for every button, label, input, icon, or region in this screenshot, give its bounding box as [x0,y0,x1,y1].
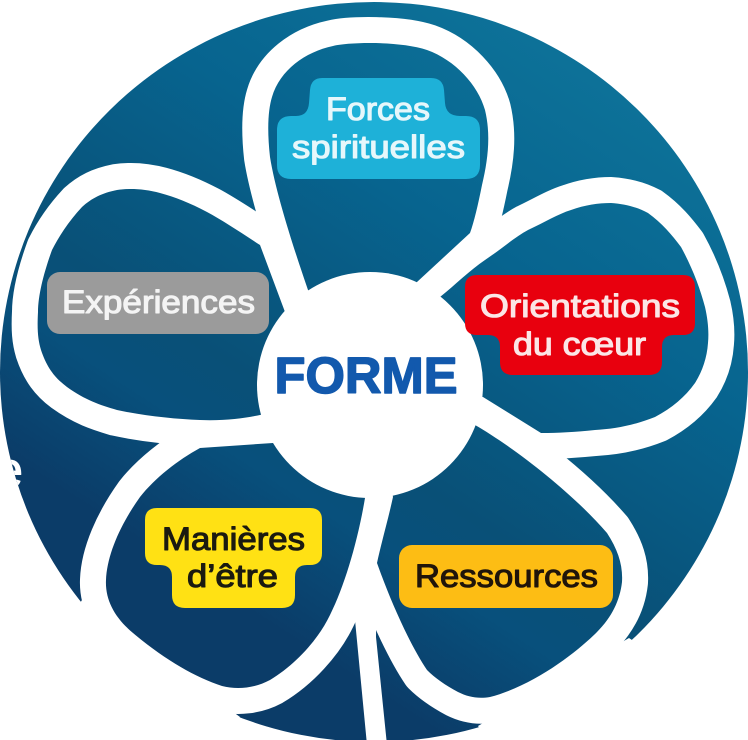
stem [352,560,387,740]
label: Expériences: Expériences [62,284,255,320]
label: Forces spirituelles: spirituelles [292,129,465,165]
white cut-out: lower left edge [20,600,240,740]
label: Manières d'être [145,508,322,608]
petal interiors [38,43,708,698]
label: Forces spirituelles [277,78,480,179]
petal outlines [38,43,708,698]
label: Manières d'être: Manières [162,521,305,557]
label: Ressources: Ressources [415,558,598,594]
centre circle [257,272,483,498]
label: Manières d'être: d’être [187,558,278,594]
label: Orientations du cœur: Orientations [480,288,680,324]
label: Forces spirituelles: Forces [326,91,430,127]
label: Expériences [47,272,269,334]
label: Orientations du cœur: du cœur [513,326,646,362]
white cut-out: lower right edge [478,638,720,740]
label: Ressources [399,545,613,608]
title: FORME: FORME [274,347,458,404]
label: Orientations du cœur [465,275,695,375]
